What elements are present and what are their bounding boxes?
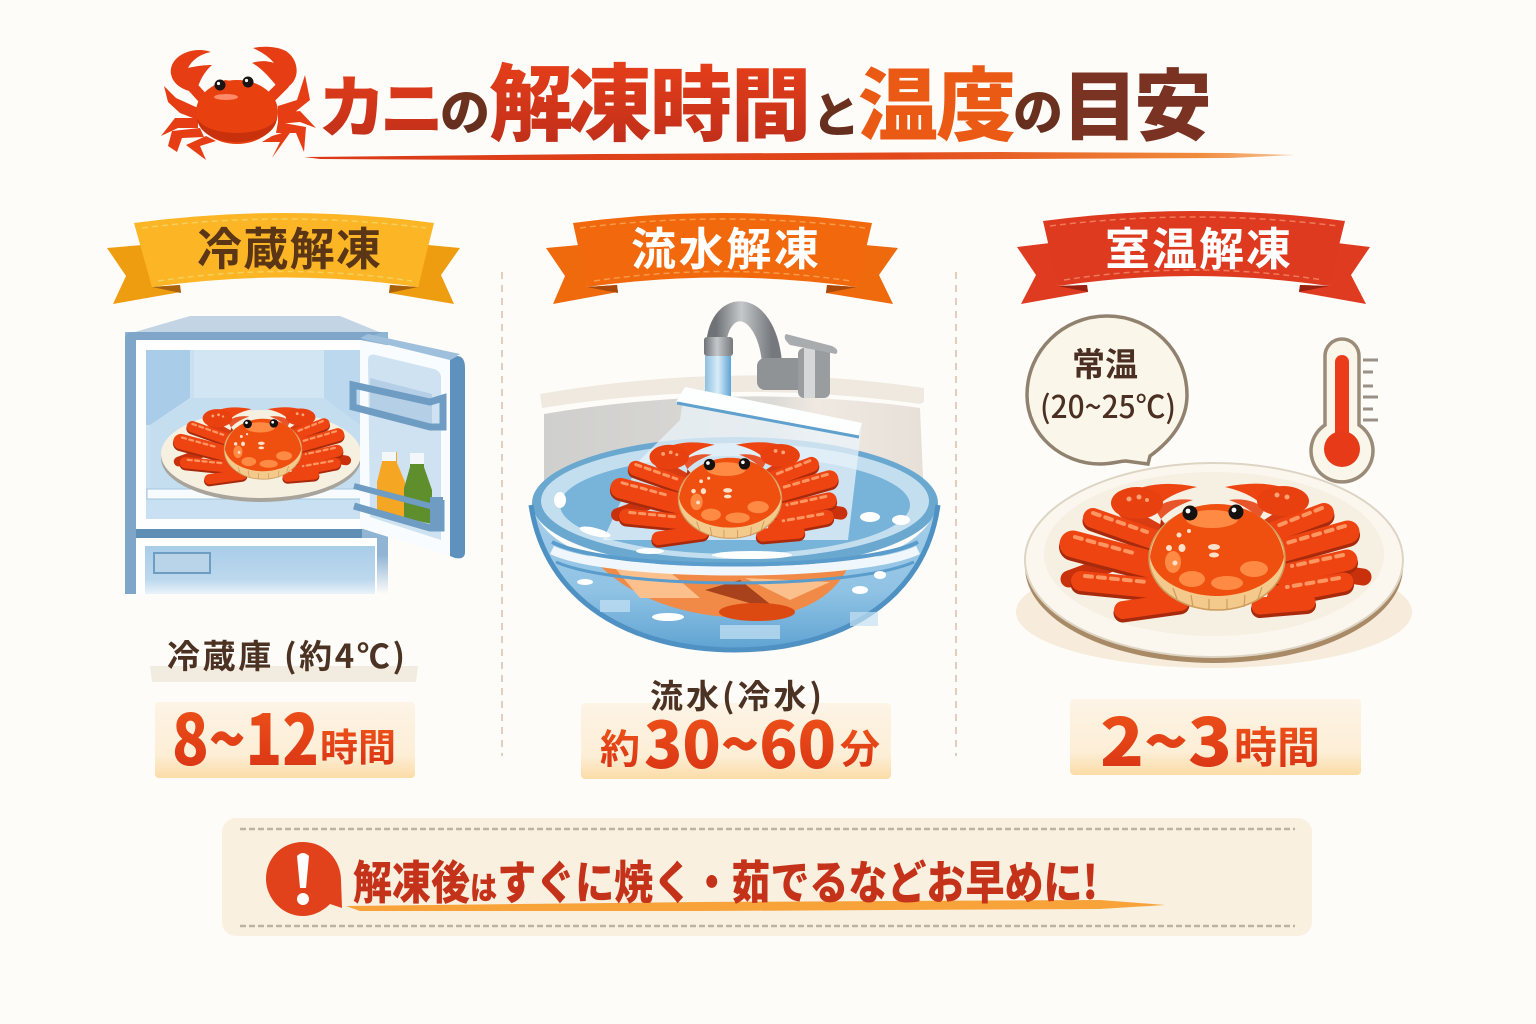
- icon: thermometer: [1311, 339, 1378, 482]
- ribbon: refrigerator heading: 冷蔵解凍: [197, 213, 381, 278]
- title brush underline: [304, 152, 1295, 160]
- time badge: 8 to 12 hours: [155, 685, 415, 786]
- title: の: [1013, 73, 1063, 145]
- time badge: 30 to 60 minutes: 約: [600, 717, 640, 775]
- panel: refrigerator thawing: [107, 213, 465, 786]
- title: ニ: [380, 59, 444, 151]
- panel: room temperature thawing: [1016, 211, 1412, 786]
- callout text: 解凍後はすぐに焼く・茹でるなどお早めに!: [353, 847, 1098, 913]
- title: 時: [650, 39, 732, 158]
- speech bubble: ambient temperature: 常温: [1072, 338, 1138, 386]
- callout: after thawing advice: [222, 818, 1312, 936]
- time badge: 2 to 3 hours: 2~3: [1100, 690, 1232, 786]
- label: refrigerator temperature: 冷蔵庫 (約4℃): [167, 630, 405, 678]
- time badge: 30 to 60 minutes: [581, 695, 891, 787]
- title: 目: [1062, 46, 1138, 156]
- title: カ: [318, 53, 386, 152]
- title: 間: [731, 42, 811, 158]
- title: 凍: [568, 38, 652, 159]
- speech bubble: ambient temperature: [1027, 316, 1187, 464]
- divider lines: [502, 272, 956, 756]
- icon: open refrigerator with crab: [125, 316, 465, 594]
- ribbon: running water heading: 流水解凍: [631, 213, 819, 278]
- time badge: 8 to 12 hours: 8~12: [172, 685, 319, 786]
- title: 解: [489, 38, 573, 159]
- title: 安: [1134, 45, 1212, 157]
- ribbon: running water heading: [546, 213, 898, 304]
- ribbon: refrigerator heading: [107, 213, 460, 304]
- title crab icon: [161, 47, 316, 160]
- title: の: [440, 73, 490, 145]
- panel: running water thawing: [531, 213, 938, 787]
- time badge: 2 to 3 hours: [1070, 690, 1361, 786]
- title: と: [812, 76, 860, 146]
- title: 度: [936, 42, 1016, 158]
- label: running water: 流水(冷水): [650, 670, 822, 718]
- icon: exclamation bubble: [266, 842, 342, 916]
- time badge: 30 to 60 minutes: 分: [840, 717, 880, 775]
- icon: crab on plate: [1016, 463, 1412, 668]
- icon: faucet and bowl with crab in bag: [531, 311, 938, 650]
- speech bubble: ambient temperature: (20~25℃): [1040, 382, 1176, 427]
- ribbon: room temperature heading: 室温解凍: [1105, 213, 1291, 278]
- brush underline: [346, 900, 1165, 911]
- time badge: 8 to 12 hours: 時間: [320, 717, 396, 772]
- time badge: 30 to 60 minutes: 30~60: [644, 695, 836, 787]
- title: 温: [858, 42, 938, 158]
- time badge: 2 to 3 hours: 時間: [1234, 714, 1320, 776]
- ribbon: room temperature heading: [1017, 211, 1370, 304]
